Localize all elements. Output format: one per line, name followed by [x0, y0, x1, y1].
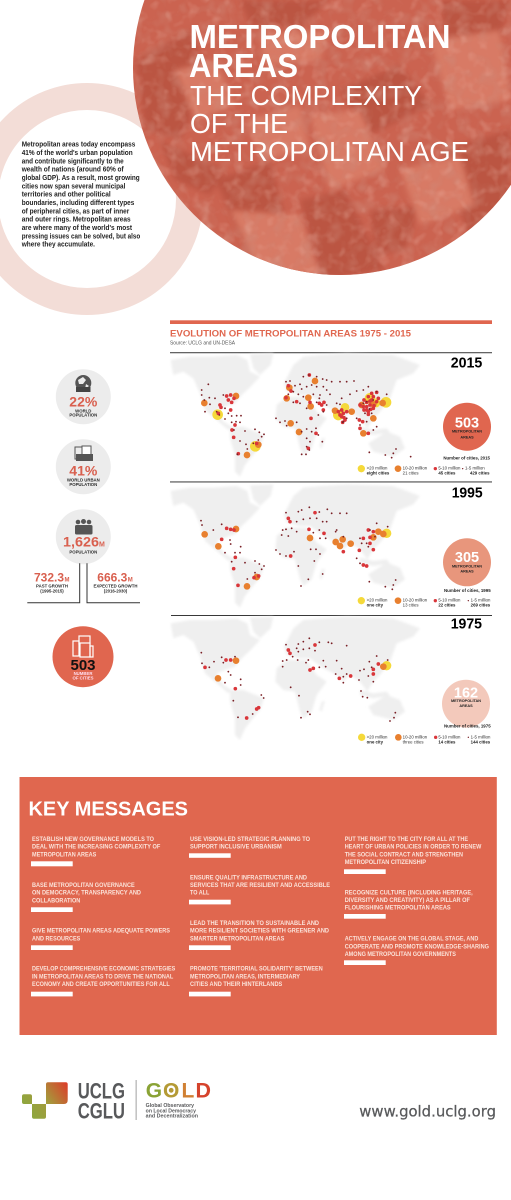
background ring — [0, 96, 190, 302]
logo: GOLD: Global Observatory — [146, 1103, 194, 1109]
messages column 3: AMONG METROPOLITAN GOVERNMENTS — [345, 951, 456, 958]
stat: world population: WORLD — [75, 408, 91, 413]
badge: 503 metropolitan areas: 503 — [455, 416, 479, 432]
stat: expected growth — [94, 571, 137, 593]
legend 2015: 5-10 million — [438, 466, 461, 471]
legend 1975: 5-10 million — [438, 734, 461, 739]
messages column 3: FLOURISHING METROPOLITAN AREAS — [345, 905, 451, 912]
logo: UCLG: CGLU — [78, 1098, 125, 1123]
messages column 1: IN METROPOLITAN AREAS TO DRIVE THE NATIONAL — [32, 973, 173, 980]
badge: 305 metropolitan areas: METROPOLITAN — [452, 564, 482, 568]
intro text: cities now span several municipal — [22, 181, 125, 190]
icon: buildings — [73, 636, 93, 657]
messages column 2: SMARTER METROPOLITAN AREAS — [190, 935, 284, 942]
stat: world urban population: 41% — [69, 463, 98, 479]
title: AREAS — [189, 47, 298, 84]
title: METROPOLITAN AGE — [190, 136, 469, 167]
stat: number of cities: OF CITIES — [72, 675, 94, 680]
logo: GOLD: on Local Democracy — [146, 1108, 196, 1114]
intro text: pressing issues can be solved, but also — [22, 231, 141, 240]
messages column 2: LEAD THE TRANSITION TO SUSTAINABLE AND — [190, 920, 319, 927]
messages column 2: SUPPORT INCLUSIVE URBANISM — [190, 844, 282, 851]
legend 1995: 5-10 million — [438, 598, 461, 603]
messages column 1: DEAL WITH THE INCREASING COMPLEXITY OF — [32, 844, 160, 851]
legend 2015 — [358, 455, 491, 476]
messages column 1: COLLABORATION — [32, 897, 81, 904]
messages column 1 — [31, 836, 175, 996]
legend 2015: 21 cities — [403, 471, 419, 476]
badge: 305 metropolitan areas — [443, 538, 491, 586]
legend 1995: Number of cities, 1995 — [444, 588, 491, 593]
intro text: Metropolitan areas today encompass — [22, 140, 135, 149]
stat: world urban population: WORLD URBAN — [67, 477, 100, 482]
logo: GOLD — [146, 1080, 211, 1120]
stat: past growth: M — [64, 578, 70, 584]
icon: UCLG squares — [22, 1082, 68, 1119]
logo: GOLD: and Decentralization — [146, 1114, 198, 1120]
hero circle with city photo — [130, 0, 511, 280]
legend 1975: 1-5 million — [471, 734, 491, 739]
year label 2015: 2015 — [451, 355, 482, 371]
icon: city blocks — [75, 446, 93, 461]
cities 2015 — [202, 375, 411, 458]
logo: UCLG — [22, 1078, 136, 1123]
logo: GOLD: D — [196, 1080, 211, 1103]
messages column 1: ESTABLISH NEW GOVERNANCE MODELS TO — [32, 836, 154, 843]
stat: population: 1,626 — [63, 535, 100, 550]
messages column 1: ECONOMY AND CREATE OPPORTUNITIES FOR ALL — [32, 981, 170, 988]
stat: population: M — [99, 542, 105, 549]
stat: population — [56, 509, 111, 564]
logo: UCLG: UCLG — [78, 1078, 125, 1103]
legend 1975: 144 cities — [471, 739, 491, 744]
messages column 3: COOPERATE AND PROMOTE KNOWLEDGE-SHARING — [345, 943, 489, 950]
intro text: wealth of nations (around 60% of — [21, 165, 124, 174]
badge: 162 metropolitan areas: AREAS — [459, 704, 473, 708]
stat: number of cities — [52, 626, 114, 687]
legend 1995: 269 cities — [471, 603, 491, 608]
heading: map section: EVOLUTION OF METROPOLITAN AREAS 1975 - 2015 — [170, 329, 412, 340]
messages column 3: DIVERSITY AND CREATIVITY) AS A PILLAR OF — [345, 897, 470, 904]
intro text: are where many of the world's most — [22, 223, 132, 232]
messages column 3: PUT THE RIGHT TO THE CITY FOR ALL AT THE — [345, 836, 468, 843]
badge: 162 metropolitan areas: METROPOLITAN — [451, 699, 481, 703]
icon: globe — [75, 375, 91, 392]
legend 1995: one city — [367, 603, 384, 608]
messages column 2: PROMOTE 'TERRITORIAL SOLIDARITY' BETWEEN — [190, 966, 323, 973]
world map 2015 — [171, 353, 420, 477]
intro text: territories and other political — [22, 190, 111, 199]
messages column 1: GIVE METROPOLITAN AREAS ADEQUATE POWERS — [32, 928, 170, 935]
intro text — [21, 140, 141, 249]
badge: 305 metropolitan areas: AREAS — [460, 569, 474, 573]
legend 1995: 1-5 million — [471, 598, 491, 603]
badge: 503 metropolitan areas: AREAS — [460, 435, 474, 439]
year label 1975: 1975 — [451, 617, 482, 633]
messages column 1: BASE METROPOLITAN GOVERNANCE — [32, 882, 135, 889]
stat: world urban population — [56, 439, 111, 494]
panel: map 1975 — [171, 617, 420, 740]
messages column 1: AND RESOURCES — [32, 935, 80, 942]
badge: 503 metropolitan areas: METROPOLITAN — [452, 430, 482, 434]
intro text: boundaries, including different types — [22, 198, 134, 207]
legend 2015: eight cities — [367, 471, 390, 476]
badge: 162 metropolitan areas: 162 — [454, 685, 478, 701]
intro text: global GDP). As a result, most growing — [22, 173, 140, 182]
legend 2015: Number of cities, 2015 — [443, 455, 491, 460]
title — [189, 18, 469, 167]
stat: number of cities: NUMBER — [74, 671, 93, 676]
panel: key messages — [20, 777, 497, 1035]
stat: past growth: 732.3 — [34, 571, 64, 585]
stat: world population: POPULATION — [69, 413, 97, 418]
legend 1995 — [358, 588, 491, 608]
legend 2015: >20 million — [367, 466, 388, 471]
legend 1975: Number of cities, 1975 — [444, 724, 491, 729]
messages column 1: ON DEMOCRACY, TRANSPARENCY AND — [32, 890, 141, 897]
legend 2015: 45 cities — [438, 471, 456, 476]
legend 1995: 13 cities — [403, 603, 419, 608]
messages column 2: ENSURE QUALITY INFRASTRUCTURE AND — [190, 874, 307, 881]
legend 1975: three cities — [403, 739, 424, 744]
messages column 2: SERVICES THAT ARE RESILIENT AND ACCESSIBLE — [190, 882, 330, 889]
website url: www.gold.uclg.org — [359, 1103, 496, 1121]
intro text: and contribute significantly to the — [22, 156, 124, 165]
legend 2015: 1-5 million — [465, 466, 485, 471]
stat: population: POPULATION — [69, 550, 97, 555]
legend 2015: 429 cities — [470, 471, 490, 476]
messages column 3 — [344, 836, 489, 965]
title: THE COMPLEXITY — [190, 80, 422, 111]
legend 1975 — [358, 724, 491, 744]
legend 1975: 10-20 million — [403, 734, 428, 739]
messages column 3: HEART OF URBAN POLICIES IN ORDER TO RENEW — [345, 844, 481, 851]
messages column 2 — [189, 836, 330, 996]
title: OF THE — [190, 108, 288, 139]
messages column 3: METROPOLITAN CITIZENSHIP — [345, 859, 426, 866]
legend 1975: >20 million — [367, 734, 388, 739]
messages column 3: RECOGNIZE CULTURE (INCLUDING HERITAGE, — [345, 890, 473, 897]
badge: 305 metropolitan areas: 305 — [455, 550, 479, 566]
messages column 2: MORE RESILIENT SOCIETIES WITH GREENER AND — [190, 928, 329, 935]
stat: number of cities: 503 — [70, 657, 96, 674]
messages column 2: METROPOLITAN AREAS, INTERMEDIARY — [190, 973, 301, 980]
stat: expected growth: M — [128, 578, 133, 584]
logo: GOLD: O — [163, 1080, 179, 1103]
messages column 1: DEVELOP COMPREHENSIVE ECONOMIC STRATEGIES — [32, 966, 175, 973]
stat: expected growth: EXPECTED GROWTH — [94, 584, 137, 589]
panel: map 2015 — [171, 353, 420, 477]
cities 1995 — [201, 507, 396, 589]
messages column 3: ACTIVELY ENGAGE ON THE GLOBAL STAGE, AND — [345, 936, 479, 943]
intro text: 41% of the world's urban population — [22, 148, 133, 157]
badge: 503 metropolitan areas — [443, 403, 491, 451]
messages column 2: TO ALL — [190, 890, 209, 897]
intro text: where they accumulate. — [21, 240, 95, 249]
intro text: and outer rings. Metropolitan areas — [22, 215, 131, 224]
year label 1995: 1995 — [452, 485, 483, 501]
world map 1975 — [171, 617, 420, 740]
legend 1995: 22 cities — [438, 603, 456, 608]
logo: GOLD: G — [146, 1080, 162, 1103]
messages column 1: METROPOLITAN AREAS — [32, 851, 96, 858]
messages column 3: THE SOCIAL CONTRACT AND STRENGTHEN — [345, 851, 463, 858]
heading: map section — [170, 320, 492, 346]
logo: GOLD: L — [182, 1080, 194, 1103]
messages column 2: USE VISION-LED STRATEGIC PLANNING TO — [190, 836, 310, 843]
stat: expected growth: 666.3 — [97, 571, 128, 585]
badge: 162 metropolitan areas — [442, 680, 490, 728]
messages column 2: CITIES AND THEIR HINTERLANDS — [190, 981, 282, 988]
stat: expected growth: (2016-2030) — [104, 588, 128, 593]
growth connector arrows — [27, 563, 140, 603]
legend 1995: >20 million — [367, 598, 388, 603]
cities 1975 — [201, 638, 395, 721]
heading: key messages: KEY MESSAGES — [28, 798, 188, 821]
world map 1995 — [171, 484, 420, 608]
icon: people — [75, 519, 92, 534]
heading: map section: Source: UCLG and UN-DESA — [170, 340, 236, 346]
stat: world population: 22% — [69, 394, 98, 410]
legend 1975: 14 cities — [438, 739, 456, 744]
stat: world urban population: POPULATION — [69, 482, 97, 487]
title: METROPOLITAN — [190, 18, 450, 55]
legend 1975: one city — [367, 739, 384, 744]
stat: world population — [56, 369, 111, 424]
stat: past growth — [34, 571, 70, 593]
stat: past growth: PAST GROWTH — [36, 584, 68, 589]
intro text: of peripheral cities, as part of inner — [22, 206, 129, 215]
stat: past growth: (1995-2015) — [40, 588, 64, 593]
legend 1995: 10-20 million — [403, 598, 428, 603]
panel: map 1995 — [171, 484, 420, 608]
legend 2015: 10-20 million — [403, 466, 428, 471]
